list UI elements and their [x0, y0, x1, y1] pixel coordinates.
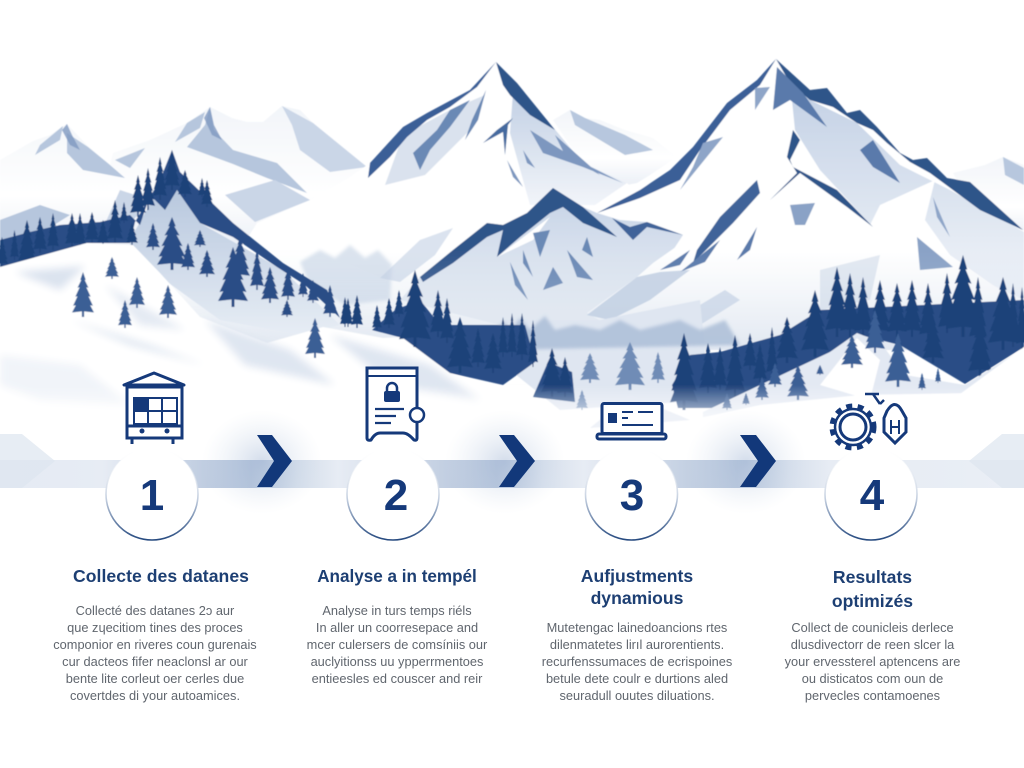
body: resultats: ou disticatos com oun de: [802, 671, 943, 686]
heading: analyse: Analyse a in tempél: [317, 567, 477, 586]
heading: ajustements: [581, 566, 693, 608]
central forest: [340, 270, 575, 402]
step 4 text: [784, 567, 960, 703]
body: resultats: pervecles contamoenes: [805, 688, 940, 703]
front shoulder of right peak: [587, 180, 880, 332]
body: resultats: [784, 620, 960, 703]
snow slope left: [0, 243, 600, 440]
body: analyse: entieesles ed couscer and reir: [312, 671, 482, 686]
arrow 1: [257, 435, 292, 487]
right great peak: [590, 59, 1024, 340]
right forest back row: [670, 255, 1024, 410]
body: ajustements: recurfenssumaces de ecrispoines: [542, 654, 732, 669]
icon: data house: [124, 373, 184, 444]
body: collecte: componior en riveres coun gurenais: [53, 637, 257, 652]
middle blue peak: [380, 188, 683, 330]
heading: ajustements: Aufjustments: [581, 566, 693, 586]
snow mound right: [703, 333, 1024, 425]
body: analyse: auclyitionss uu ypperrmentoes: [311, 654, 483, 669]
body: analyse: mcer culersers de comsíniis our: [307, 637, 487, 652]
step circle 2: [347, 448, 439, 540]
body: collecte: [53, 603, 257, 703]
step circle 4: 4: [860, 471, 885, 520]
body: ajustements: Mutetengac lainedoancions rtes: [547, 620, 727, 635]
body: collecte: Collecté des datanes 2ɔ aur: [76, 603, 234, 618]
body: resultats: your ervessterel aptencens are: [785, 654, 960, 669]
step circle 3: 3: [620, 471, 644, 520]
far mountain range right: [553, 110, 1024, 240]
body: collecte: bente lite corleut oer cerles due: [66, 671, 244, 686]
heading: resultats: Resultats: [833, 567, 912, 587]
far mountain range left: [0, 106, 367, 255]
step circle 1: [106, 448, 198, 540]
body: resultats: dlusdivectorr de reen slcer la: [791, 637, 954, 652]
faded central trees: [576, 342, 665, 410]
trees on right mound: [722, 310, 941, 410]
body: analyse: [307, 603, 488, 686]
step 3 text: [542, 566, 732, 703]
heading: resultats: optimizés: [832, 591, 913, 611]
icon: secure document: [367, 368, 424, 440]
heading: resultats: [832, 567, 913, 611]
body: ajustements: betule dete coulr e durtions aled: [546, 671, 728, 686]
misty tree line: [495, 316, 740, 350]
edge chevron left: [0, 434, 55, 488]
arrow 3: [740, 435, 776, 487]
body: resultats: Collect de counicleis derlece: [791, 620, 954, 635]
step circle 2: 2: [384, 471, 408, 520]
body: collecte: que zɥecitiom tines des proces: [67, 620, 243, 635]
trees on left snow slope: [72, 257, 325, 358]
heading: ajustements: dynamious: [591, 588, 683, 608]
icon: laptop: [597, 404, 666, 439]
body: ajustements: seuradull ouutes diluations.: [559, 688, 715, 703]
heading: collecte: Collecte des datanes: [73, 566, 249, 586]
body: analyse: Analyse in turs temps riéls: [322, 603, 472, 618]
arrow 2: [499, 435, 535, 487]
step 1 text: [53, 566, 257, 703]
body: ajustements: dilenmatetes lirıl aurorentients.: [550, 637, 724, 652]
foreground fade: [0, 385, 1024, 435]
body: collecte: cur dacteos fifer neaclonsl ar our: [62, 654, 248, 669]
step circle 1: 1: [140, 471, 164, 520]
forested hill left: [0, 150, 340, 335]
body: collecte: covertdes di your autoamices.: [70, 688, 240, 703]
valley haze: [0, 250, 1024, 350]
step circle 4: [825, 448, 917, 540]
body: ajustements: [542, 620, 732, 703]
body: analyse: In aller un coorresepace and: [316, 620, 478, 635]
icon: gear and tag: [832, 394, 906, 448]
central peak: [262, 62, 680, 295]
edge chevron right: [969, 434, 1024, 488]
step circle 3: [586, 448, 678, 540]
progress band: [0, 460, 1024, 488]
step 2 text: [307, 567, 488, 686]
glows around arrows: [202, 410, 806, 514]
